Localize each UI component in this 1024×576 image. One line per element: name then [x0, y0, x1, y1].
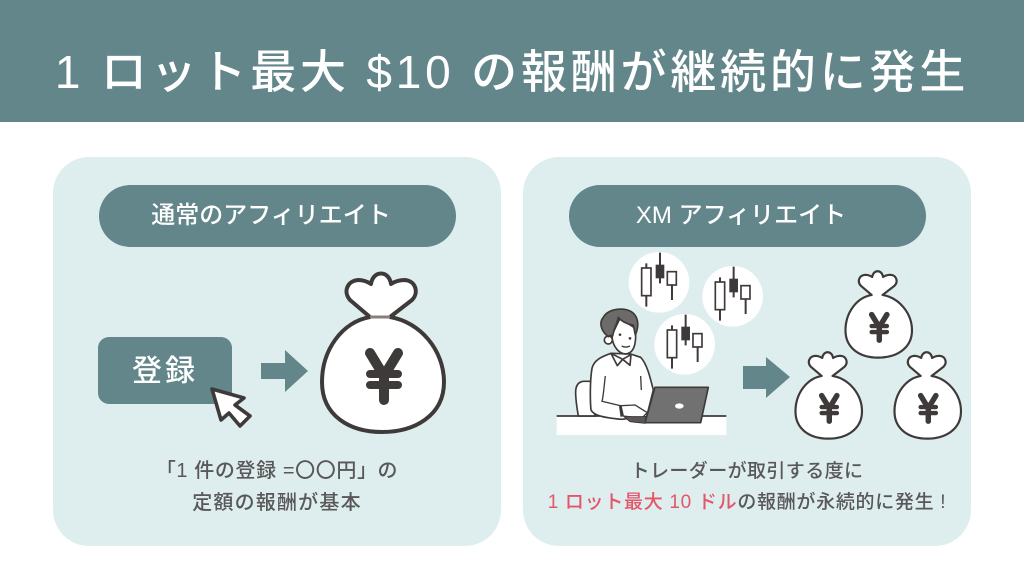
illustration: trader with candlestick charts — [557, 252, 763, 435]
panel: XM affiliate — [523, 157, 971, 546]
panel: normal affiliate — [53, 157, 501, 546]
caption line 1: 「1 件の登録 =〇〇円」の — [156, 460, 398, 482]
title: 1 ロット最大 $10 の報酬が継続的に発生 — [55, 46, 969, 98]
caption line 2: 1 ロット最大 10 ドルの報酬が永続的に発生 ! — [548, 492, 946, 513]
title banner — [0, 0, 1024, 122]
caption: normal affiliate — [156, 460, 398, 514]
heading: normal affiliate — [99, 185, 456, 247]
caption line 1: トレーダーが取引する度に — [631, 461, 863, 482]
caption line 2: 定額の報酬が基本 — [192, 492, 362, 514]
chart bubble 3 — [654, 314, 715, 375]
heading: XM affiliate: XM アフィリエイト — [636, 202, 846, 229]
chair — [576, 381, 595, 416]
icon: money bag right — [894, 352, 961, 439]
icon: money bag left — [795, 352, 862, 439]
register button — [98, 337, 232, 404]
icon: large money bag — [322, 274, 444, 432]
chart bubble 1 — [629, 252, 689, 313]
arrow: right panel — [743, 357, 790, 398]
heading: normal affiliate: 通常のアフィリエイト — [151, 202, 391, 229]
chart bubble 2 — [702, 266, 763, 327]
person — [590, 309, 653, 419]
heading: XM affiliate — [569, 185, 926, 247]
register button: 登録 — [132, 355, 198, 388]
desk — [557, 416, 726, 435]
icon: cursor — [212, 389, 250, 426]
icon: money bag top — [845, 271, 912, 358]
laptop — [624, 387, 708, 423]
arrow: left panel — [261, 350, 308, 392]
caption: XM affiliate — [548, 460, 946, 513]
